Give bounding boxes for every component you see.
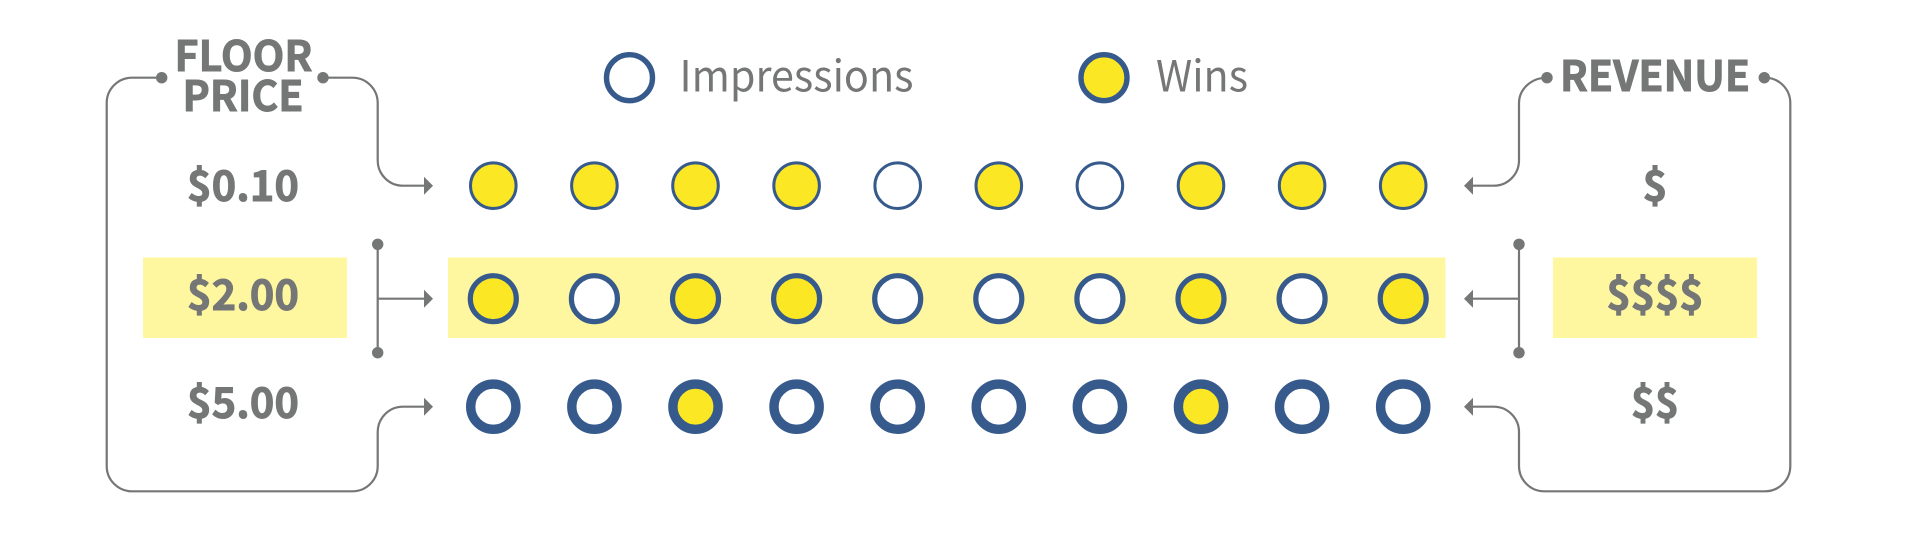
row 1: $0.10 impressions and wins xyxy=(470,163,1426,208)
legend: wins xyxy=(1081,42,1248,104)
legend: wins: Wins xyxy=(1156,42,1248,104)
revenue value: $$: $$ xyxy=(1631,370,1679,431)
heading: revenue: REVENUE xyxy=(1560,43,1750,104)
floor price value: $0.10: $0.10 xyxy=(187,153,299,214)
left connector: floor price bracket to top and bottom rows xyxy=(107,72,433,491)
heading: floor price xyxy=(174,23,312,124)
revenue value: $: $ xyxy=(1643,153,1667,214)
floor price value: $5.00: $5.00 xyxy=(187,370,299,431)
row 2: $2.00 impressions and wins xyxy=(470,276,1426,322)
row 3: $5.00 impressions and wins xyxy=(471,384,1426,429)
legend: impressions: Impressions xyxy=(680,42,914,104)
highlight band: revenue $$$$ xyxy=(1553,258,1757,338)
left connector: middle row arrow xyxy=(372,239,433,358)
highlight band: floor price $2.00 xyxy=(143,258,347,338)
floor price value: $2.00: $2.00 xyxy=(187,262,299,323)
highlight band: middle row of impressions xyxy=(448,258,1446,338)
right connector: middle row arrow xyxy=(1464,239,1525,358)
heading: floor price: FLOOR xyxy=(174,23,312,84)
revenue value: $$$$: $$$$ xyxy=(1606,262,1704,323)
right connector: revenue bracket to top and bottom rows xyxy=(1464,72,1790,491)
heading: floor price: PRICE xyxy=(182,63,304,124)
